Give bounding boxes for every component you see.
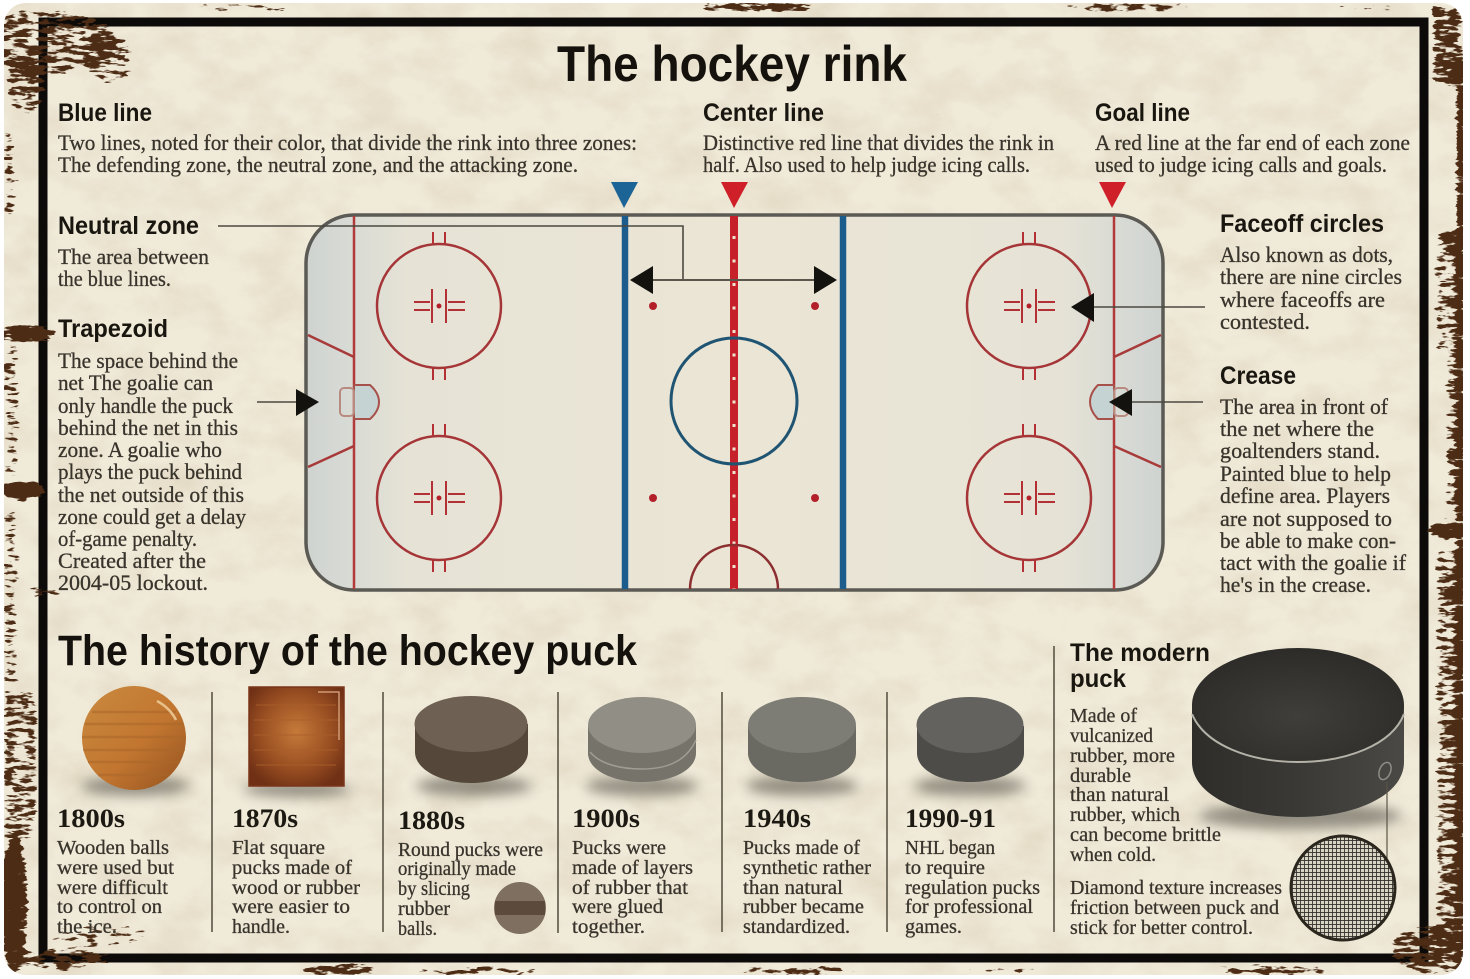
text block: 1800s: Wooden balls — [57, 837, 169, 859]
text block: neutral zone: The area between — [58, 244, 209, 269]
text block: trapezoid: zone could get a delay — [58, 504, 246, 529]
text block: 1880s — [398, 806, 543, 940]
text block: crease: be able to make con- — [1220, 528, 1396, 553]
text block: 1990-91: games. — [905, 916, 962, 938]
text block: trapezoid: The space behind the — [58, 348, 238, 373]
hockey rink diagram — [306, 215, 1163, 590]
icon: 1990-91 puck — [914, 697, 1026, 796]
text block: the modern puck: friction between puck and — [1070, 897, 1279, 919]
text block: 1880s: rubber — [398, 898, 450, 920]
text block: faceoff circles: Faceoff circles — [1220, 210, 1384, 238]
right crease and net — [1090, 385, 1128, 419]
text block: the modern puck: Made of — [1070, 705, 1137, 727]
text block: faceoff circles: there are nine circles — [1220, 264, 1402, 289]
text block: the modern puck — [1070, 639, 1282, 939]
blue lines — [625, 216, 843, 589]
goal lines — [354, 216, 1114, 589]
text block: 1900s: Pucks were — [572, 837, 666, 859]
text block: 1870s: Flat square — [232, 837, 325, 859]
text block: 1880s: balls. — [398, 918, 437, 940]
faceoff hash marks and crosshairs — [414, 232, 1055, 572]
text block: the modern puck: can become brittle — [1070, 824, 1221, 846]
text block: 1990-91: to require — [905, 857, 985, 879]
text block: trapezoid: behind the net in this — [58, 415, 238, 440]
text block: 1940s — [743, 804, 871, 938]
arrow: trapezoid — [257, 389, 319, 416]
text block: the modern puck: puck — [1070, 665, 1126, 693]
text block: the modern puck: durable — [1070, 765, 1131, 787]
center circle — [671, 338, 797, 464]
icon: wooden ball — [81, 686, 189, 796]
text block: faceoff circles: Also known as dots, — [1220, 242, 1393, 267]
text block: neutral zone: Neutral zone — [58, 212, 199, 240]
text block: neutral zone: the blue lines. — [58, 266, 171, 291]
text block: 1990-91 — [905, 804, 1040, 938]
text block: trapezoid: net The goalie can — [58, 370, 213, 395]
text block: 1880s: Round pucks were — [398, 839, 543, 861]
marker: blue line — [611, 182, 638, 208]
title: The hockey rink — [557, 36, 907, 92]
text block: 1900s: together. — [572, 916, 645, 938]
text block: 1990-91: 1990-91 — [905, 804, 996, 833]
text block: 1870s: handle. — [232, 916, 290, 938]
text block: 1880s: originally made — [398, 858, 516, 880]
text block: trapezoid — [58, 315, 246, 595]
text block: 1940s: synthetic rather — [743, 857, 871, 879]
icon: diamond texture detail — [1291, 836, 1395, 940]
text block: 1990-91: NHL began — [905, 837, 995, 859]
icon: 1940s puck — [746, 697, 858, 796]
text block: faceoff circles: contested. — [1220, 309, 1310, 334]
heading: history of the hockey puck: The history of the hockey puck — [58, 627, 637, 675]
text block: crease: Painted blue to help — [1220, 461, 1391, 486]
text block: crease: the net where the — [1220, 416, 1374, 441]
text block: 1900s: made of layers — [572, 857, 693, 879]
center line dots — [732, 236, 736, 589]
text block: blue line: Blue line — [58, 99, 152, 127]
icon: 1900s layered puck — [586, 697, 698, 796]
text block: blue line: The defending zone, the neutral zone, and the attacking zone. — [58, 152, 578, 177]
text block: the modern puck: rubber, which — [1070, 804, 1180, 826]
text block: center line — [703, 99, 1054, 177]
text block: 1940s: Pucks made of — [743, 837, 860, 859]
left crease and net — [340, 385, 379, 419]
leader line: texture detail — [1386, 782, 1388, 858]
text block: trapezoid: Trapezoid — [58, 315, 168, 343]
text block: 1870s: were easier to — [232, 896, 350, 918]
text block: goal line: used to judge icing calls and goals. — [1095, 152, 1387, 177]
text block: goal line: Goal line — [1095, 99, 1190, 127]
text block: 1800s: were used but — [57, 857, 174, 879]
text block: the modern puck: stick for better control. — [1070, 917, 1253, 939]
text block: 1870s — [232, 804, 360, 938]
text block: 1880s: 1880s — [398, 806, 465, 835]
text block: crease — [1220, 362, 1407, 597]
arrow: faceoff circles — [1071, 293, 1205, 322]
text block: blue line — [58, 99, 637, 177]
text block: 1800s: to control on — [57, 896, 162, 918]
arrow: crease — [1109, 389, 1203, 416]
text block: 1800s: 1800s — [57, 804, 125, 833]
text block: 1870s: wood or rubber — [232, 877, 360, 899]
text block: 1940s: rubber became — [743, 896, 864, 918]
text block: the modern puck: The modern — [1070, 639, 1210, 667]
marker: center line — [721, 182, 748, 208]
text block: the modern puck: Diamond texture increases — [1070, 877, 1282, 899]
text block: goal line: A red line at the far end of each zone — [1095, 130, 1410, 155]
text block: 1940s: 1940s — [743, 804, 811, 833]
text block: 1900s — [572, 804, 693, 938]
text block: center line: half. Also used to help judge icing calls. — [703, 152, 1030, 177]
text block: center line: Center line — [703, 99, 824, 127]
text block: faceoff circles — [1220, 210, 1402, 334]
column dividers — [212, 646, 1054, 933]
text block: 1990-91: for professional — [905, 896, 1033, 918]
icon: modern puck — [1192, 648, 1404, 829]
marker: goal line — [1099, 182, 1126, 208]
neutral zone dots — [649, 302, 819, 502]
text block: crease: The area in front of — [1220, 394, 1389, 419]
text block: trapezoid: 2004-05 lockout. — [58, 570, 208, 595]
text block: crease: are not supposed to — [1220, 506, 1392, 531]
text block: 1900s: were glued — [572, 896, 663, 918]
text block: 1990-91: regulation pucks — [905, 877, 1040, 899]
text block: 1880s: by slicing — [398, 878, 470, 900]
arrow: neutral zone leader and span — [218, 226, 837, 294]
text block: trapezoid: Created after the — [58, 548, 206, 573]
text block: 1940s: than natural — [743, 877, 843, 899]
text block: the modern puck: than natural — [1070, 784, 1169, 806]
icon: sliced rubber ball — [494, 882, 546, 934]
bottom referee arc — [690, 545, 778, 589]
text block: the modern puck: vulcanized — [1070, 725, 1153, 747]
text block: 1870s: pucks made of — [232, 857, 352, 879]
text block: trapezoid: the net outside of this — [58, 482, 244, 507]
rink surface — [306, 215, 1163, 590]
text block: crease: goaltenders stand. — [1220, 438, 1380, 463]
text block: 1900s: of rubber that — [572, 877, 688, 899]
text block: faceoff circles: where faceoffs are — [1220, 287, 1385, 312]
text block: trapezoid: only handle the puck — [58, 393, 233, 418]
text block: trapezoid: zone. A goalie who — [58, 437, 222, 462]
text block: crease: define area. Players — [1220, 483, 1390, 508]
text block: 1800s: the ice. — [57, 916, 117, 938]
icon: 1880s puck — [414, 696, 532, 796]
text block: blue line: Two lines, noted for their color, that divide the rink into three zones: — [58, 130, 637, 155]
text block: center line: Distinctive red line that divides the rink in — [703, 130, 1054, 155]
text block: trapezoid: plays the puck behind — [58, 459, 242, 484]
text block: goal line — [1095, 99, 1410, 177]
trapezoid lines — [308, 335, 1161, 467]
icon: square puck — [243, 687, 351, 797]
text block: 1870s: 1870s — [232, 804, 298, 833]
text block: crease: he's in the crease. — [1220, 572, 1371, 597]
text block: the modern puck: rubber, more — [1070, 745, 1175, 767]
text block: 1940s: standardized. — [743, 916, 850, 938]
text block: crease: tact with the goalie if — [1220, 550, 1407, 575]
text block: crease: Crease — [1220, 362, 1296, 390]
faceoff circles — [377, 244, 1091, 560]
text block: 1800s — [57, 804, 174, 938]
text block: the modern puck: when cold. — [1070, 844, 1156, 866]
text block: 1900s: 1900s — [572, 804, 640, 833]
text block: neutral zone — [58, 212, 209, 291]
center line — [730, 216, 738, 589]
text block: trapezoid: of-game penalty. — [58, 526, 197, 551]
text block: 1800s: were difficult — [57, 877, 168, 899]
